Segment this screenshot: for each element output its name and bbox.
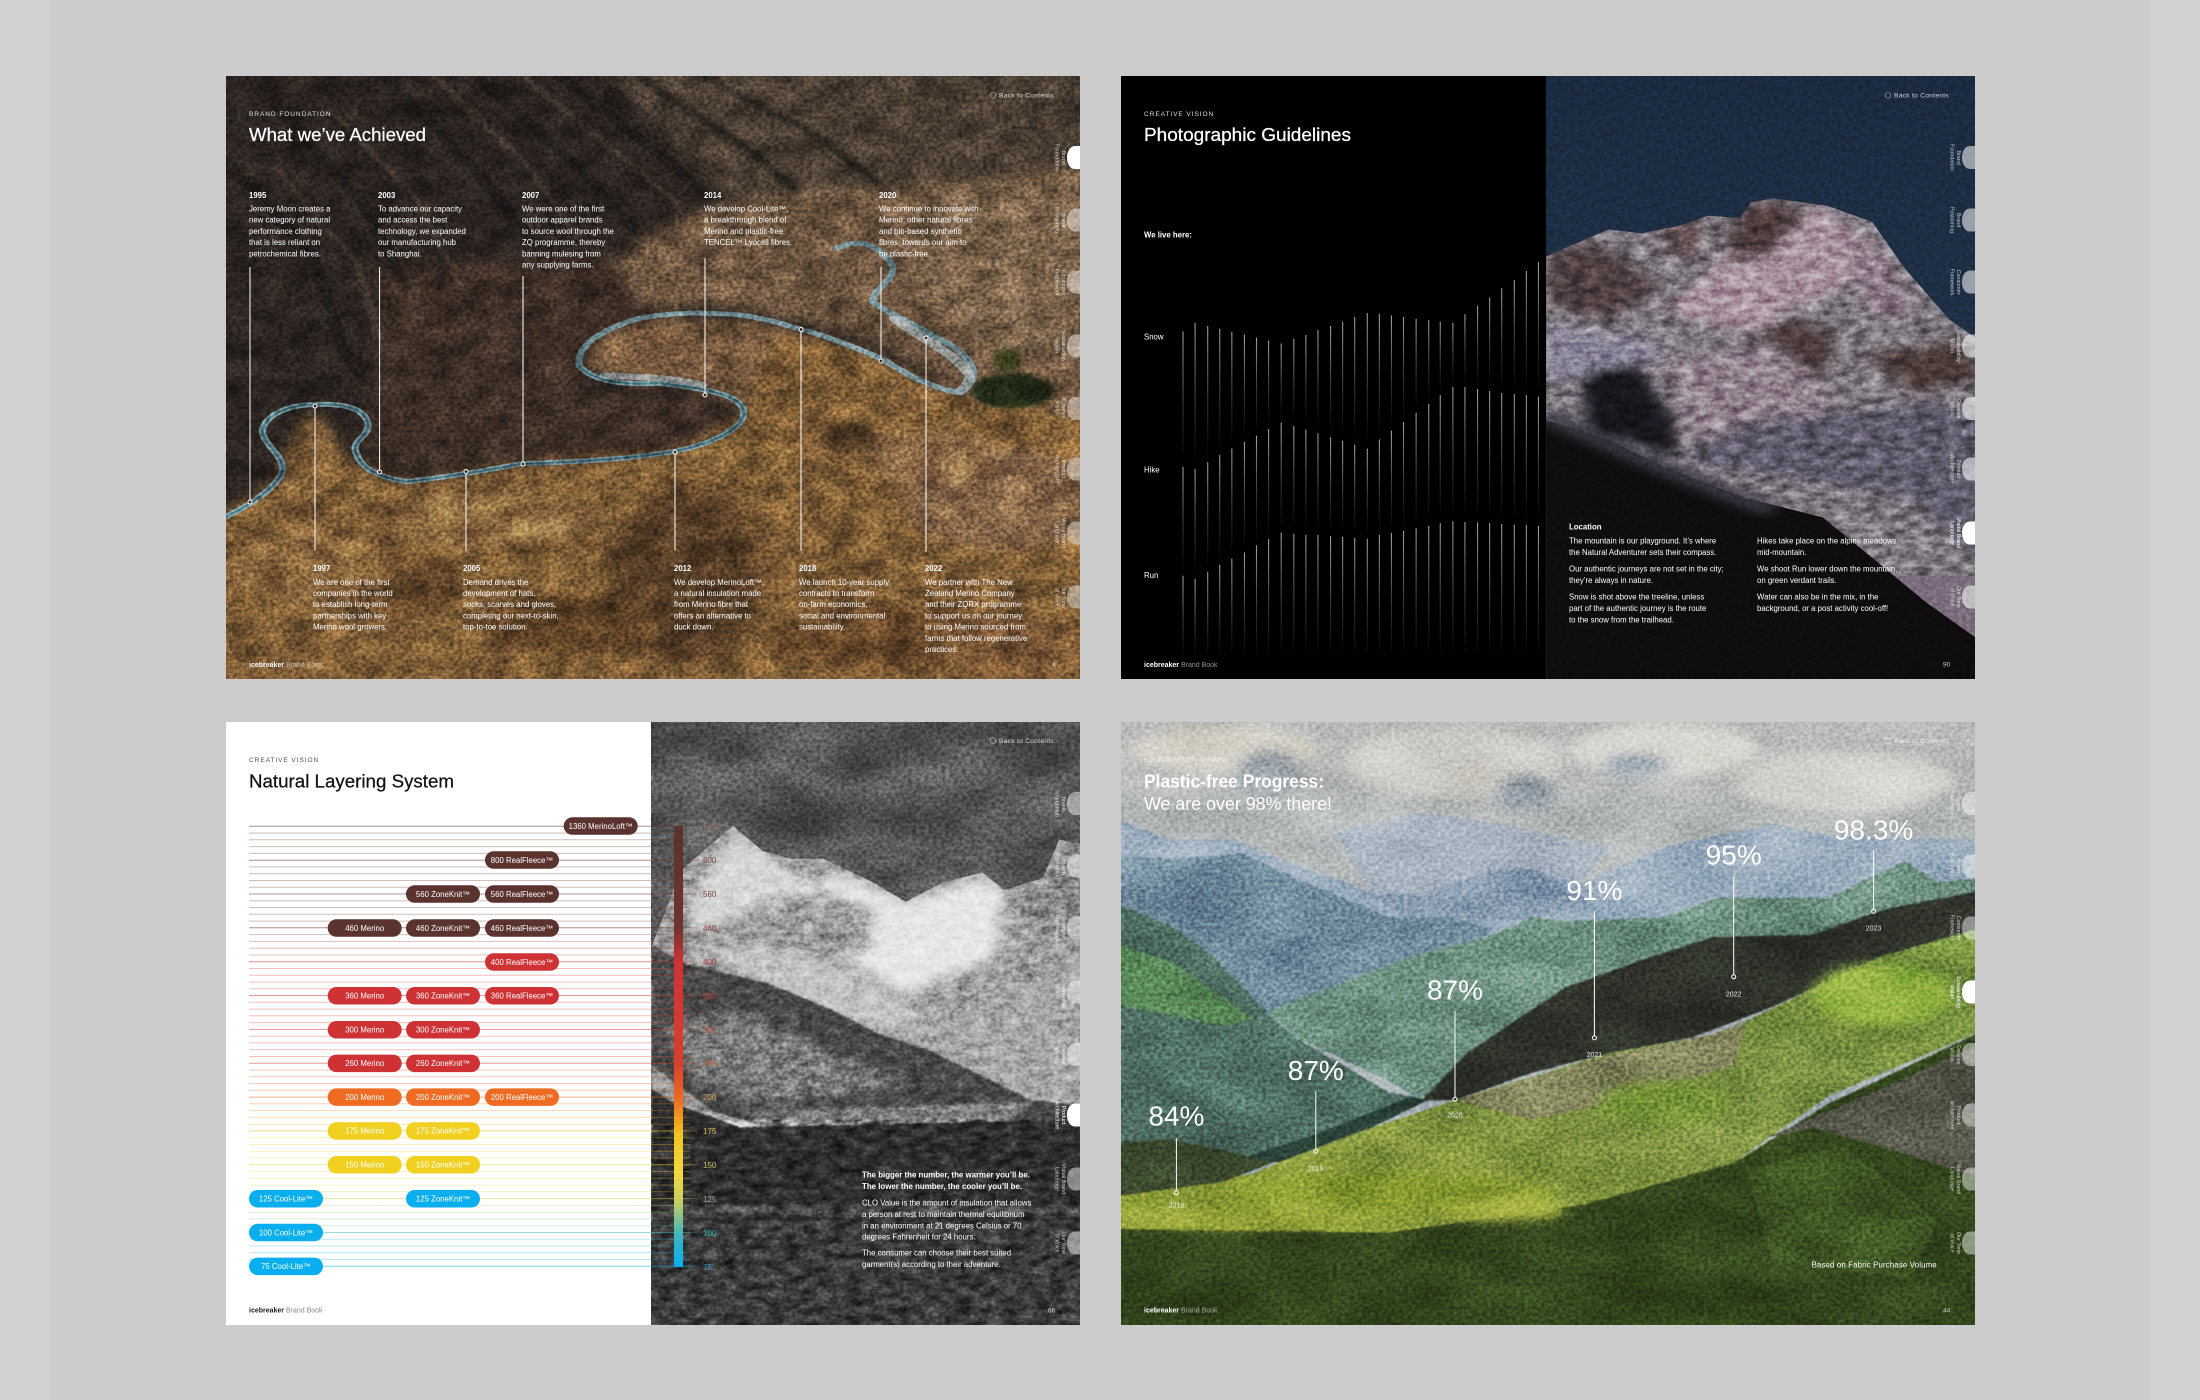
milestone 1997: 1997: [313, 564, 330, 573]
chart label: We live here:: [1144, 230, 1192, 240]
stat 2019: 87%: 87%: [1288, 1055, 1344, 1086]
side tabs: Positioning: [1948, 207, 1954, 233]
milestone 2003: our manufacturing hub: [378, 238, 457, 247]
milestone 2005: development of hats,: [463, 589, 535, 598]
side tabs: Positioning: [1054, 853, 1060, 879]
side tabs: Consumer: [1955, 916, 1961, 941]
location text column 1: part of the authentic journey is the route: [1569, 604, 1706, 613]
pills: orange row: [328, 1088, 559, 1106]
trees: [971, 348, 1054, 408]
pills: orange row: 200 Merino: [345, 1093, 385, 1102]
milestone 1997: to establish long-term: [313, 600, 388, 609]
side tabs: Visual Brand: [1955, 518, 1961, 548]
scale numbers: 75: [703, 1263, 712, 1272]
side tabs: Creative: [1955, 1044, 1961, 1065]
pills: brown rows: [328, 817, 638, 937]
pills: red rows: 300 Merino: [345, 1026, 385, 1034]
side tabs: Framework: [1948, 269, 1954, 296]
footer: icebreaker Brand Book: [249, 1308, 323, 1314]
stat 2022: 95%: [1706, 839, 1762, 998]
scale numbers: 260: [703, 1059, 717, 1068]
pills: blue rows: [249, 1190, 480, 1275]
pills: brown rows: 560 RealFleece™: [491, 890, 553, 899]
milestone 2020: [879, 191, 979, 258]
stat 2020: 87%: 87%: [1427, 975, 1483, 1006]
side tabs: Brand: [1060, 213, 1066, 227]
location text column 1: they’re always in nature.: [1569, 576, 1653, 585]
milestone 1995: performance clothing: [249, 227, 322, 236]
milestone 2018: We launch 10-year supply: [799, 578, 889, 587]
label: Snow: Snow: [1144, 332, 1164, 341]
stat 2020: 87%: 2020: [1447, 1112, 1463, 1120]
page number: 4: [1052, 662, 1056, 668]
back link: Back to Contents: [999, 738, 1054, 745]
side tabs: Brand: [1060, 859, 1066, 873]
pills: yellow rows: [328, 1122, 480, 1174]
milestone 2007: to source wool through the: [522, 227, 614, 236]
scale numbers: 800: [703, 856, 717, 865]
side tabs: Architecture: [1054, 455, 1060, 483]
panel: Photographic Guidelines: [1121, 76, 1996, 692]
side tabs: Product: [1060, 460, 1066, 479]
eyebrow: BRAND FOUNDATION: [249, 111, 331, 118]
eyebrow: CREATIVE VISION: [249, 757, 319, 764]
side tabs: Brand: [1955, 796, 1961, 811]
side tabs: Architecture: [1948, 1101, 1954, 1129]
milestone 2005: top-to-toe solution.: [463, 623, 528, 632]
photo: aerial river valley: [209, 62, 1098, 692]
pills: blue rows: 125 ZoneKnit™: [416, 1194, 470, 1204]
side tabs: Product: [1955, 460, 1961, 479]
side tabs: Visual Brand: [1060, 1164, 1066, 1194]
side tabs: Brand: [1955, 213, 1961, 227]
side tabs: Visual Brand: [1955, 1164, 1961, 1194]
stat 2018: 84%: [1148, 1101, 1204, 1210]
side tabs: Language: [1054, 521, 1060, 545]
milestone 2007: 2007: [522, 191, 539, 200]
milestone 2014: TENCEL™ Lyocell fibres.: [704, 238, 792, 247]
milestone 2012: 2012: [674, 564, 692, 573]
title: We are over 98% there!: [1144, 793, 1332, 814]
milestone 2003: [378, 191, 466, 258]
panel: Natural Layering System: [226, 722, 1101, 1337]
scale numbers: 100: [703, 1229, 717, 1238]
milestone 2003: to Shanghai.: [378, 249, 422, 258]
side tabs: of Voice: [1948, 587, 1954, 607]
milestone 2012: from Merino fibre that: [674, 600, 749, 609]
location heading: Location: [1569, 522, 1602, 532]
side tabs: Our Tone: [1060, 586, 1066, 608]
location text column 1: to the snow from the trailhead.: [1569, 616, 1674, 624]
location text column 1: Our authentic journeys are not set in the city;: [1569, 564, 1724, 574]
photo: dusk mountain: [1546, 76, 1996, 692]
explanatory text: [862, 1170, 1031, 1269]
side tabs: Architecture: [1948, 455, 1954, 483]
side tabs: Sustainability: [1955, 330, 1961, 362]
milestone 2014: Merino and plastic-free: [704, 227, 783, 236]
scale numbers: 360: [703, 992, 717, 1001]
side tabs: Consumer: [1955, 270, 1961, 295]
side tabs: Foundation: [1054, 144, 1060, 171]
milestone 2018: on-farm economics,: [799, 600, 867, 609]
side tabs: [1054, 144, 1080, 608]
title: Plastic-free Progress:: [1144, 770, 1324, 792]
pills: red rows: 260 Merino: [345, 1059, 385, 1068]
pills: red rows: [328, 953, 559, 1072]
side tabs: [1948, 144, 1975, 608]
side tabs: Framework: [1948, 915, 1954, 942]
pills: red rows: 400 RealFleece™: [491, 958, 553, 967]
milestone 1995: 1995: [249, 191, 267, 200]
white left page: [226, 722, 651, 1325]
side tabs: Our Tone: [1060, 1232, 1066, 1254]
side tabs: Brand: [1955, 859, 1961, 873]
milestone 2020: Merino, other natural fibres: [879, 216, 972, 225]
side tabs: Creative: [1060, 1044, 1066, 1065]
side tabs: Vision: [1948, 339, 1954, 353]
location text column 1: The mountain is our playground. It’s where: [1569, 536, 1716, 546]
milestone 2022: We partner with The New: [925, 578, 1013, 587]
milestone 2012: duck down.: [674, 623, 713, 632]
milestone 2005: [463, 564, 559, 632]
panel: What we've Achieved: [209, 62, 1098, 692]
side tabs: of Voice: [1054, 1233, 1060, 1253]
stat 2020: 87%: [1427, 975, 1483, 1120]
side tabs: Framework: [1054, 269, 1060, 296]
explanatory text: CLO Value is the amount of insulation that allows: [862, 1198, 1031, 1208]
milestone 2003: technology, we expanded: [378, 227, 466, 236]
panel: Plastic-free Progress: [1110, 722, 1993, 1337]
explanatory text: degrees Fahrenheit for 24 hours.: [862, 1232, 976, 1242]
milestone 2022: to using Merino sourced from: [925, 623, 1026, 632]
river: [220, 243, 973, 519]
stat 2021: 91%: 2021: [1587, 1052, 1602, 1059]
stat 2023: 98.3%: 98.3%: [1834, 814, 1913, 845]
pills: blue rows: 125 Cool-Lite™: [259, 1194, 313, 1204]
pills: red rows: 360 RealFleece™: [491, 992, 553, 1000]
milestone 2022: practices.: [925, 645, 958, 654]
pills: yellow rows: 150 Merino: [345, 1160, 385, 1170]
milestone 2005: completing our next-to-skin,: [463, 611, 559, 620]
milestone 2003: To advance our capacity: [378, 204, 462, 214]
explanatory text: The lower the number, the cooler you’ll be.: [862, 1182, 1022, 1191]
side tabs: Sustainability: [1955, 976, 1961, 1008]
location text column 1: the Natural Adventurer sets their compass.: [1569, 548, 1716, 557]
milestone 1997: [313, 564, 393, 632]
side tabs: Language: [1948, 521, 1954, 545]
milestone 2007: outdoor apparel brands: [522, 216, 603, 225]
stat 2021: 91%: [1566, 875, 1622, 1059]
pills: yellow rows: 175 Merino: [345, 1127, 385, 1136]
side tabs: Vision: [1054, 985, 1060, 999]
page number: 66: [1048, 1308, 1056, 1314]
stat 2019: 87%: [1288, 1055, 1344, 1173]
stat 2021: 91%: 91%: [1566, 875, 1622, 906]
stat 2023: 98.3%: 2023: [1866, 926, 1881, 932]
milestone 2014: a breakthrough blend of: [704, 216, 787, 225]
scale numbers: 400: [703, 958, 717, 967]
scale numbers: 125: [703, 1195, 717, 1204]
stat 2019: 87%: 2019: [1308, 1166, 1324, 1173]
milestone 2014: [704, 191, 792, 247]
source note: Based on Fabric Purchase Volume: [1812, 1260, 1937, 1270]
title: [1144, 770, 1332, 814]
milestone 1995: [249, 191, 331, 258]
title: Photographic Guidelines: [1144, 124, 1351, 145]
side tabs: Product: [1060, 1106, 1066, 1125]
milestone 2012: We develop MerinoLoft™,: [674, 578, 764, 587]
milestone 2022: [925, 564, 1027, 654]
scale numbers: 175: [703, 1127, 717, 1136]
scale numbers: 300: [703, 1026, 717, 1035]
side tabs: Sustainability: [1060, 976, 1066, 1008]
side tabs: Vision: [1054, 339, 1060, 353]
footer: icebreaker Brand Book: [249, 662, 323, 669]
milestone 2018: [799, 564, 889, 632]
milestone 1995: petrochemical fibres.: [249, 249, 321, 258]
milestone 1997: We are one of the first: [313, 578, 390, 587]
milestone 1997: partnerships with key: [313, 611, 386, 620]
milestone 1997: Merino wool growers.: [313, 623, 387, 632]
milestone 2012: a natural insulation made: [674, 589, 761, 598]
back link: Back to Contents: [1894, 738, 1949, 745]
label: Run: Run: [1144, 571, 1158, 580]
pills: orange row: 200 RealFleece™: [491, 1093, 553, 1102]
milestone 2018: contracts to transform: [799, 589, 874, 598]
milestone 2012: offers an alternative to: [674, 611, 752, 620]
eyebrow: SUSTAINABILITY VISION: [1144, 757, 1224, 764]
location text column 2: We shoot Run lower down the mountain,: [1757, 564, 1897, 574]
milestone 1995: Jeremy Moon creates a: [249, 204, 331, 214]
milestone 1995: new category of natural: [249, 216, 330, 225]
side tabs: Sustainability: [1060, 330, 1066, 362]
pills: brown rows: 800 RealFleece™: [491, 856, 553, 865]
back link: Back to Contents: [1894, 92, 1949, 100]
milestone 2020: fibres, towards our aim to: [879, 238, 967, 247]
side tabs: Positioning: [1948, 853, 1954, 879]
photo: black and white mountain: [651, 722, 1101, 1337]
side tabs: Vision: [1054, 401, 1060, 416]
milestone 2003: and access the best: [378, 216, 448, 225]
page number: 44: [1943, 1308, 1951, 1314]
stat 2023: 98.3%: [1834, 814, 1913, 932]
milestone 2005: Demand drives the: [463, 578, 528, 587]
location text column 2: Water can also be in the mix, in the: [1757, 592, 1878, 602]
footer: icebreaker Brand Book: [1144, 662, 1218, 669]
explanatory text: The consumer can choose their best suited: [862, 1248, 1011, 1258]
milestone 2012: [674, 564, 764, 632]
scale numbers: 1360: [703, 822, 721, 831]
pills: brown rows: 460 RealFleece™: [491, 924, 553, 933]
eyebrow: CREATIVE VISION: [1144, 111, 1214, 118]
side tabs: of Voice: [1948, 1233, 1954, 1253]
milestone 2005: socks, scarves and gloves,: [463, 600, 556, 609]
side tabs: Vision: [1054, 1047, 1060, 1062]
side tabs: Our Tone: [1955, 1232, 1961, 1254]
milestone 2022: to support us on our journey: [925, 611, 1022, 620]
side tabs: Architecture: [1054, 1101, 1060, 1129]
side tabs: Consumer: [1060, 916, 1066, 941]
pills: brown rows: 560 ZoneKnit™: [416, 890, 470, 899]
side tabs: Positioning: [1054, 207, 1060, 233]
scale numbers: [703, 822, 721, 1272]
side tabs: Brand: [1955, 150, 1961, 165]
explanatory text: The bigger the number, the warmer you’ll be.: [862, 1170, 1030, 1180]
milestone 2022: and their ZQRX programme: [925, 600, 1021, 609]
page number: 90: [1943, 662, 1951, 668]
side tabs: Vision: [1948, 985, 1954, 999]
location text column 1: Snow is shot above the treeline, unless: [1569, 592, 1704, 602]
pills: red rows: 360 ZoneKnit™: [416, 992, 470, 1000]
scale numbers: 460: [703, 924, 717, 933]
colour scale bar: [674, 826, 683, 1267]
milestone 2014: 2014: [704, 191, 722, 200]
milestone 2018: social and environmental: [799, 611, 886, 620]
pills: red rows: 260 ZoneKnit™: [416, 1059, 470, 1068]
milestone 2007: [522, 191, 614, 270]
side tabs: Framework: [1054, 915, 1060, 942]
side tabs: Vision: [1948, 1047, 1954, 1062]
location text column 2: background, or a post activity cool-off!: [1757, 604, 1888, 613]
location text column 2: on green verdant trails.: [1757, 576, 1837, 585]
line chart: elevation lines: [1182, 262, 1539, 657]
scale numbers: 560: [703, 890, 717, 899]
stat 2018: 84%: 84%: [1148, 1101, 1204, 1132]
explanatory text: in an environment at 21 degrees Celsius or 70: [862, 1221, 1022, 1230]
title: Natural Layering System: [249, 770, 454, 792]
pills: brown rows: 1360 MerinoLoft™: [569, 822, 633, 831]
milestone 2007: ZQ programme, thereby: [522, 238, 605, 247]
side tabs: Creative: [1955, 398, 1961, 419]
side tabs: Foundation: [1948, 790, 1954, 817]
side tabs: Product: [1955, 1106, 1961, 1125]
label: Hike: Hike: [1144, 465, 1160, 474]
stat 2018: 84%: 2018: [1169, 1202, 1184, 1210]
timeline stems: [248, 258, 928, 552]
milestone 2014: We develop Cool-Lite™,: [704, 204, 788, 214]
side tabs: Brand: [1060, 796, 1066, 811]
side tabs: Language: [1054, 1167, 1060, 1191]
pills: orange row: 200 ZoneKnit™: [416, 1093, 470, 1102]
milestone 1997: companies in the world: [313, 589, 393, 598]
milestone 2022: Zealand Merino Company: [925, 589, 1015, 598]
milestone 2018: sustainability.: [799, 623, 845, 632]
pills: red rows: 360 Merino: [345, 992, 385, 1000]
milestone 2022: 2022: [925, 564, 943, 573]
stat 2022: 95%: 95%: [1706, 839, 1762, 870]
location text column 2: Hikes take place on the alpine meadows,: [1757, 536, 1899, 546]
pills: yellow rows: 175 ZoneKnit™: [416, 1127, 470, 1136]
milestone 2007: banning mulesing from: [522, 249, 601, 258]
back link: Back to Contents: [999, 92, 1054, 100]
milestone 2007: We were one of the first: [522, 204, 605, 214]
pills: yellow rows: 150 ZoneKnit™: [416, 1160, 470, 1170]
milestone 2020: be plastic-free.: [879, 249, 930, 258]
side tabs: [1948, 790, 1975, 1254]
explanatory text: a person at rest to maintain thermal equilibrium: [862, 1210, 1025, 1219]
pills: red rows: 300 ZoneKnit™: [416, 1026, 470, 1034]
side tabs: Visual Brand: [1060, 518, 1066, 548]
footer: icebreaker Brand Book: [1144, 1308, 1218, 1314]
side tabs: Language: [1948, 1167, 1954, 1191]
side tabs: Foundation: [1054, 790, 1060, 817]
title: What we’ve Achieved: [249, 124, 426, 145]
side tabs: Brand: [1060, 150, 1066, 165]
stat 2022: 95%: 2022: [1726, 992, 1742, 998]
pills: brown rows: 460 Merino: [345, 924, 385, 933]
side tabs: Vision: [1948, 401, 1954, 416]
scale numbers: 150: [703, 1161, 717, 1170]
milestone 2018: 2018: [799, 564, 817, 573]
milestone 1995: that is less reliant on: [249, 238, 320, 247]
photo: green alpine valley: [1110, 722, 1993, 1337]
pills: blue rows: 75 Cool-Lite™: [261, 1262, 311, 1271]
scale numbers: 200: [703, 1093, 717, 1102]
milestone 2007: any supplying farms.: [522, 260, 594, 270]
side tabs: Our Tone: [1955, 586, 1961, 608]
milestone 2022: farms that follow regenerative: [925, 634, 1027, 643]
milestone 2020: 2020: [879, 191, 897, 200]
side tabs: of Voice: [1054, 587, 1060, 607]
side tabs: Consumer: [1060, 270, 1066, 295]
milestone 2020: We continue to innovate with: [879, 204, 979, 214]
location text column 2: mid-mountain.: [1757, 548, 1806, 557]
explanatory text: garment(s) according to their adventure.: [862, 1260, 1001, 1269]
milestone 2020: and bio-based synthetic: [879, 227, 961, 236]
milestone 2003: 2003: [378, 191, 396, 200]
horizontal scale lines: [249, 826, 697, 1266]
milestone 2005: 2005: [463, 564, 481, 573]
pills: brown rows: 460 ZoneKnit™: [416, 924, 470, 933]
side tabs: [1054, 790, 1080, 1254]
black left page: [1121, 76, 1546, 679]
side tabs: Foundation: [1948, 144, 1954, 171]
pills: blue rows: 100 Cool-Lite™: [259, 1228, 313, 1237]
side tabs: Creative: [1060, 398, 1066, 419]
